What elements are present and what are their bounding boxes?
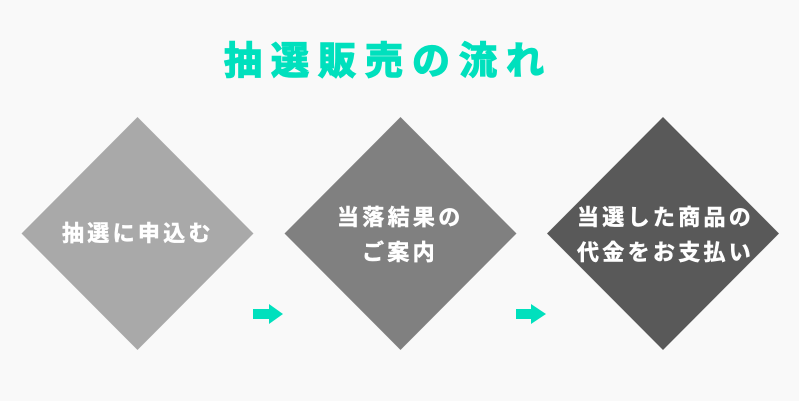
diamond: step 2 (284, 117, 516, 350)
arrow: step 1 to 2 (253, 304, 283, 324)
step 1 label: 抽選に申込む (62, 221, 214, 246)
diamond: step 3 (547, 117, 779, 350)
step 3 label line 2: 代金をお支払い (577, 240, 754, 265)
arrow: step 2 to 3 (516, 304, 546, 324)
step 2 label line 2: ご案内 (362, 240, 438, 265)
title: 抽選販売の流れ (224, 41, 553, 83)
step 2 label line 1: 当落結果の (337, 205, 464, 230)
diamond: step 1 (22, 117, 254, 350)
step 3 label line 1: 当選した商品の (577, 205, 754, 230)
